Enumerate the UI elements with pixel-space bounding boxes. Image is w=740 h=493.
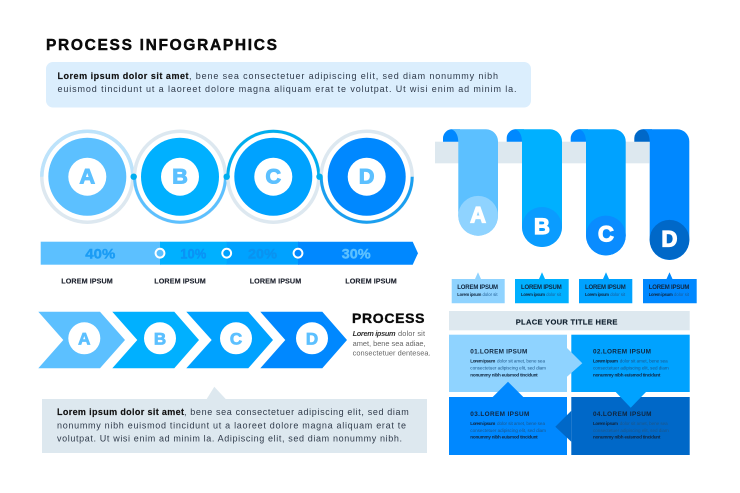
chevron process — [38, 312, 347, 368]
intro text panel — [46, 62, 531, 108]
chevron A: A — [78, 329, 90, 348]
step 01 — [449, 335, 567, 392]
percentage arrow bar: 20% — [248, 246, 278, 262]
circle process diagram — [42, 131, 412, 222]
process heading and text: consectetuer dentesea. — [353, 348, 431, 358]
step 02 text: Lorem ipsum — [593, 358, 618, 363]
bar labels: LOREM IPSUM — [345, 276, 397, 286]
intro text panel: Lorem ipsum dolor sit amet — [58, 71, 188, 81]
step 01 text: 01.LOREM IPSUM — [470, 348, 527, 355]
card D: dolor sit — [674, 292, 690, 297]
step 04 text: nonummy nibh euismod tincidunt — [593, 435, 661, 440]
circle B — [134, 131, 226, 222]
step 03 text: nonummy nibh euismod tincidunt — [470, 435, 538, 440]
ribbon D: D — [662, 227, 677, 252]
percentage arrow bar: 40% — [85, 246, 116, 262]
step 02 text: nonummy nibh euismod tincidunt — [593, 372, 661, 377]
circle B: B — [172, 164, 188, 188]
step 03 text: 03.LOREM IPSUM — [470, 411, 529, 418]
step 01 text: dolor sit amet, bene sea — [497, 358, 545, 363]
ribbon A — [443, 129, 498, 236]
process heading and text: PROCESS — [352, 310, 424, 326]
chevron A — [38, 312, 125, 368]
card C: Lorem ipsum — [585, 292, 609, 297]
step 01 text: nonummy nibh euismod tincidunt — [470, 372, 538, 377]
ribbon B: B — [534, 214, 550, 239]
step 04 text: consectetuer adipiscing elit, sed diam — [593, 428, 669, 433]
grid title bar: PLACE YOUR TITLE HERE — [516, 318, 617, 326]
card A — [452, 272, 505, 303]
chevron C — [186, 312, 273, 368]
card C: LOREM IPSUM — [585, 285, 626, 291]
circle D: D — [359, 164, 374, 188]
step 02 text: dolor sit amet, bene sea — [620, 358, 668, 363]
ribbon A: A — [470, 203, 486, 228]
card D: LOREM IPSUM — [649, 285, 689, 291]
process heading and text: dolor sit — [398, 329, 425, 338]
bar labels: LOREM IPSUM — [154, 276, 206, 286]
card C: dolor sit — [610, 292, 626, 297]
intro text panel: euismod tincidunt ut a laoreet dolore magna aliquam erat te volutpat. Ut wisi enim ad minim la. — [58, 84, 516, 94]
percentage arrow bar: 30% — [342, 246, 371, 262]
card D — [643, 272, 697, 303]
process heading and text: amet, bene sea adiae, — [353, 339, 426, 348]
step 02 text — [593, 348, 669, 377]
step 02 pointer — [616, 392, 646, 408]
chevron C: C — [230, 329, 242, 348]
circle C — [228, 131, 319, 222]
card A: dolor sit — [482, 292, 498, 297]
title: PROCESS INFOGRAPHICS — [46, 37, 277, 54]
process heading and text: Lorem ipsum — [353, 329, 396, 338]
card B — [515, 272, 569, 303]
callout text panel — [42, 387, 427, 453]
step 02 text: consectetuer adipiscing elit, sed diam — [593, 365, 669, 370]
bar labels — [61, 276, 397, 286]
chevron B — [112, 312, 199, 368]
step 01 text — [470, 348, 546, 377]
percentage arrow bar: 10% — [180, 246, 207, 262]
intro text panel: , bene sea consectetuer adipiscing elit, sed diam nonummy nibh — [189, 71, 498, 81]
four step grid — [449, 335, 690, 455]
card D: Lorem ipsum — [649, 292, 673, 297]
ribbon caption cards — [452, 272, 697, 303]
process heading and text — [352, 310, 431, 358]
grid title bar — [449, 311, 690, 330]
step 04 text — [593, 411, 669, 440]
card B: Lorem ipsum — [521, 292, 545, 297]
step 02 — [571, 335, 690, 392]
step 01 text: consectetuer adipiscing elit, sed diam — [470, 365, 546, 370]
ribbon C: C — [598, 222, 614, 247]
callout text panel: , bene sea consectetuer adipiscing elit, sed diam — [184, 407, 409, 417]
step 04 text: dolor sit amet, bene sea — [620, 421, 668, 426]
step 03 text — [470, 411, 546, 440]
ribbon C — [571, 129, 626, 256]
step 01 pointer — [567, 348, 582, 377]
circle C: C — [266, 164, 281, 188]
card B: dolor sit — [546, 292, 562, 297]
percentage arrow bar — [41, 242, 418, 265]
step 03 text: consectetuer adipiscing elit, sed diam — [470, 428, 546, 433]
circle A: A — [80, 164, 95, 188]
ribbon backing band — [435, 142, 649, 163]
chevron D — [260, 312, 347, 368]
step 04 text: Lorem ipsum — [593, 421, 618, 426]
callout text panel: Lorem ipsum dolor sit amet — [57, 407, 184, 417]
ribbon B — [507, 129, 562, 247]
step 03 — [449, 382, 567, 455]
callout text panel: volutpat. Ut wisi enim ad minim la. Adipiscing elit, sed diam nonummy nibh. — [57, 433, 402, 443]
card A: Lorem ipsum — [457, 292, 482, 297]
connector dots — [130, 174, 323, 180]
step 02 text: 02.LOREM IPSUM — [593, 348, 651, 355]
circle D — [321, 131, 412, 222]
step 04 text: 04.LOREM IPSUM — [593, 411, 652, 418]
callout text panel: nonummy nibh euismod tincidunt ut a laoreet dolore magna aliquam erat te — [57, 420, 406, 430]
step 01 text: Lorem ipsum — [470, 358, 495, 363]
chevron D: D — [306, 329, 318, 348]
bar labels: LOREM IPSUM — [61, 276, 113, 286]
card C — [579, 272, 632, 303]
step 04 — [555, 397, 690, 455]
step 03 text: dolor sit amet, bene sea — [497, 421, 545, 426]
card A: LOREM IPSUM — [457, 285, 498, 291]
step 03 text: Lorem ipsum — [470, 421, 495, 426]
ribbon D — [634, 129, 689, 260]
ribbon diagram — [435, 129, 689, 260]
circle A — [42, 131, 133, 222]
chevron B: B — [154, 329, 166, 348]
bar labels: LOREM IPSUM — [250, 276, 301, 286]
card B: LOREM IPSUM — [521, 285, 562, 291]
